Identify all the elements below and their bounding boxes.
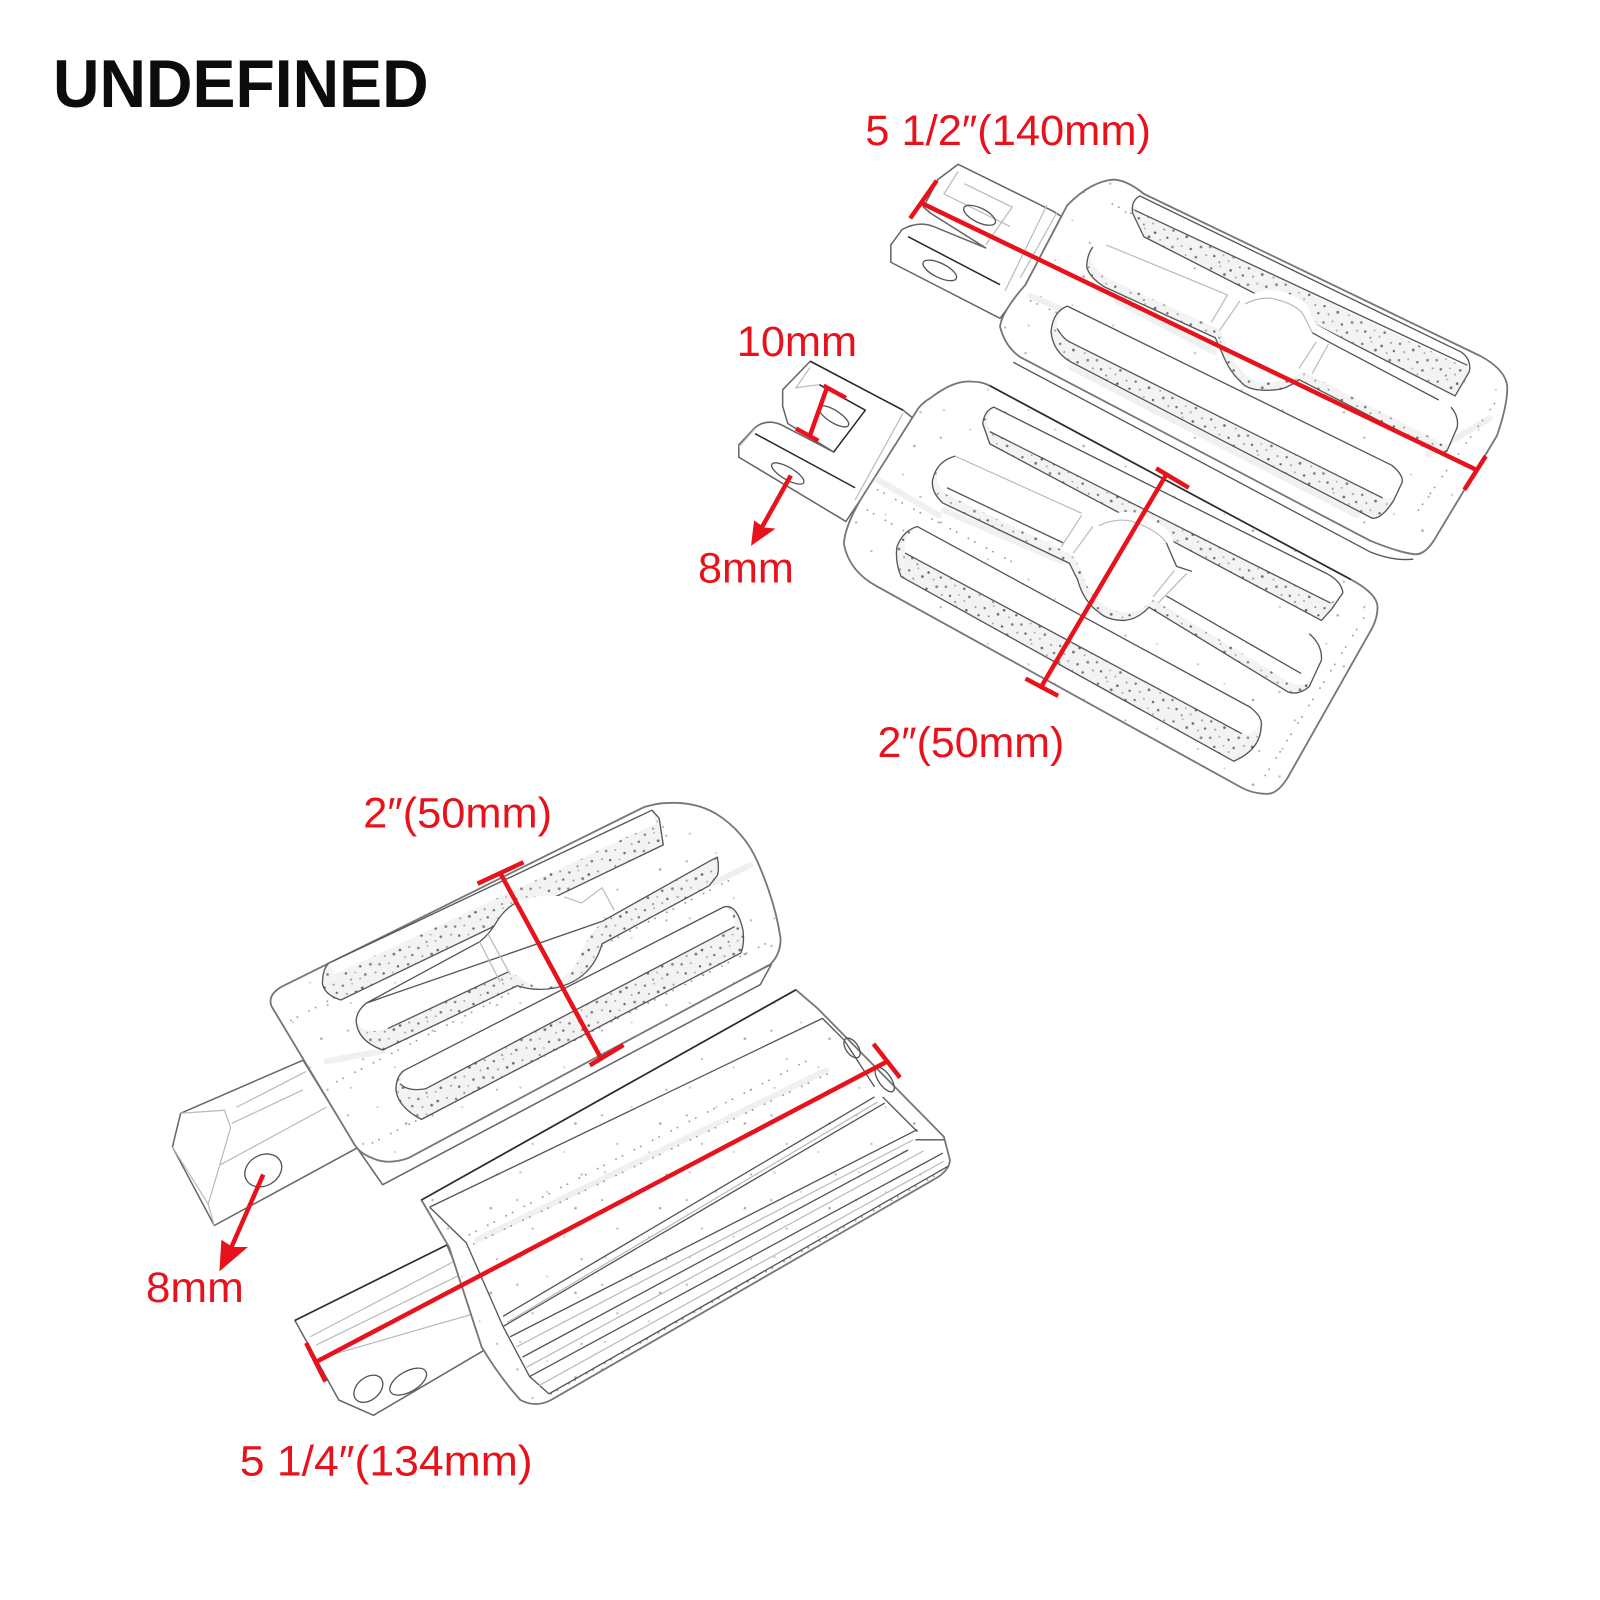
footpeg: lower left, top view (172, 803, 781, 1226)
dimension: width 50mm, upper: 2″(50mm) (878, 719, 1064, 767)
dimension: fork gap 10mm (737, 318, 857, 441)
shaft (172, 1060, 357, 1226)
dimension: length 134mm (240, 1044, 900, 1486)
footpeg: upper right, front (739, 361, 1378, 794)
fork prongs (739, 361, 913, 521)
foot plate (421, 990, 950, 1404)
title: UNDEFINED (53, 47, 429, 122)
dimension: length 140mm (865, 107, 1486, 490)
arrow: bolt hole 8mm, upper: 8mm (698, 545, 794, 593)
foot plate with ribs (1000, 180, 1507, 560)
footpeg: upper right, rear (891, 164, 1507, 560)
footpeg: lower right, underside (295, 990, 950, 1415)
fork prongs (891, 164, 1061, 318)
dimension: length 134mm: 5 1/4″(134mm) (240, 1438, 533, 1486)
arrow: bolt hole 8mm, upper (698, 476, 794, 593)
dimension: width 50mm, lower: 2″(50mm) (363, 790, 552, 838)
dimension: length 140mm: 5 1/2″(140mm) (865, 107, 1151, 155)
foot plate with ribs (844, 381, 1378, 794)
foot plate with ribs (271, 803, 781, 1185)
dimension: fork gap 10mm: 10mm (737, 318, 857, 366)
shaft (295, 1245, 490, 1415)
arrow: bolt hole 8mm, lower: 8mm (146, 1264, 244, 1312)
dimension: width 50mm, upper (878, 468, 1189, 767)
arrow: bolt hole 8mm, lower (146, 1174, 263, 1312)
dimension: width 50mm, lower (363, 790, 623, 1065)
